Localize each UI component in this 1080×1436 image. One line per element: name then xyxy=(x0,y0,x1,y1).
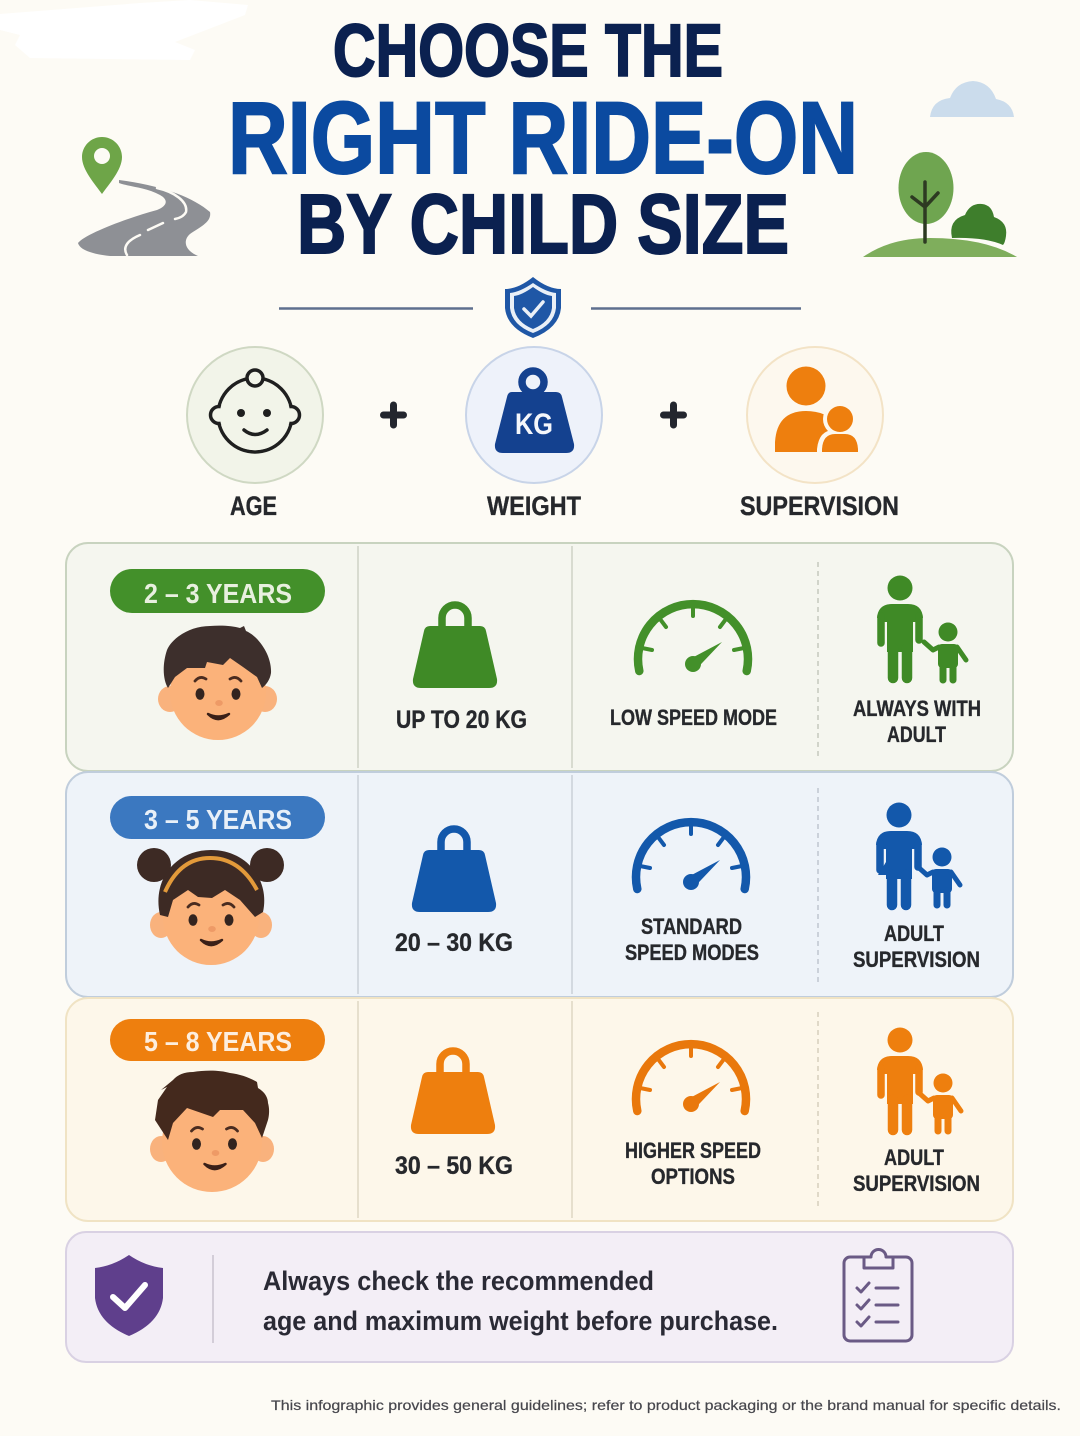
weight label: 20 – 30 KG xyxy=(395,929,513,957)
factor: weight xyxy=(466,347,602,521)
speed label xyxy=(625,914,759,965)
supervision label: ADULT xyxy=(884,1145,944,1170)
factor: weight: WEIGHT xyxy=(487,491,581,521)
age pill xyxy=(110,569,325,613)
panel: 5-8 years xyxy=(66,998,1013,1221)
title: BY CHILD SIZE xyxy=(297,177,789,271)
plus sign xyxy=(384,405,404,425)
footnote: This infographic provides general guidelines; refer to product packaging or the brand manual for specific details. xyxy=(271,1397,1061,1413)
adult and child icon xyxy=(877,1028,961,1131)
speed gauge xyxy=(638,604,748,672)
plus sign xyxy=(664,405,684,425)
factor: supervision xyxy=(740,347,899,521)
speed label xyxy=(625,1138,761,1189)
factor: age xyxy=(187,347,323,521)
speed label: SPEED MODES xyxy=(625,940,759,965)
speed label: LOW SPEED MODE xyxy=(610,705,777,730)
panel: 3-5 years xyxy=(66,772,1013,997)
adult and child icon xyxy=(876,802,960,905)
child face xyxy=(137,848,284,965)
divider with shield xyxy=(279,277,801,338)
supervision label: ADULT xyxy=(887,722,946,747)
icon: road with map pin xyxy=(78,137,210,256)
speed label: OPTIONS xyxy=(651,1164,735,1189)
age pill xyxy=(110,796,325,839)
speed label: HIGHER SPEED xyxy=(625,1138,761,1163)
age pill xyxy=(110,1019,325,1061)
weight icon xyxy=(412,829,496,912)
panel: purchase reminder xyxy=(66,1232,1013,1362)
weight icon xyxy=(413,605,497,688)
supervision label: ALWAYS WITH xyxy=(853,696,981,721)
age pill: 5 – 8 YEARS xyxy=(144,1026,292,1057)
title: CHOOSE THE xyxy=(333,9,723,92)
icon: tree and hill xyxy=(863,152,1017,257)
speed gauge xyxy=(636,1044,746,1112)
icon: clipboard xyxy=(844,1250,912,1341)
panel: 2-3 years xyxy=(66,543,1013,771)
supervision label xyxy=(853,696,981,747)
weight label: UP TO 20 KG xyxy=(396,706,527,734)
adult and child icon xyxy=(877,576,966,680)
factor: weight: KG xyxy=(515,408,553,441)
title: RIGHT RIDE-ON xyxy=(228,81,858,195)
reminder text: age and maximum weight before purchase. xyxy=(263,1306,778,1336)
icon: cloud xyxy=(930,81,1014,117)
child face xyxy=(150,1071,274,1192)
reminder text: Always check the recommended xyxy=(263,1266,654,1296)
child face xyxy=(158,626,277,740)
speed gauge xyxy=(636,822,746,890)
supervision label: SUPERVISION xyxy=(853,947,980,972)
weight label: 30 – 50 KG xyxy=(395,1152,513,1180)
age pill: 2 – 3 YEARS xyxy=(144,578,292,609)
supervision label: SUPERVISION xyxy=(853,1171,980,1196)
factor: age: AGE xyxy=(230,491,277,521)
age pill: 3 – 5 YEARS xyxy=(144,804,292,835)
speed label: STANDARD xyxy=(641,914,742,939)
reminder text xyxy=(263,1266,778,1336)
supervision label xyxy=(853,1145,980,1196)
icon: purple shield xyxy=(95,1255,163,1336)
weight icon xyxy=(411,1051,495,1134)
white patch top left xyxy=(0,0,248,60)
supervision label xyxy=(853,921,980,972)
title xyxy=(228,9,858,271)
factor: supervision: SUPERVISION xyxy=(740,491,899,521)
supervision label: ADULT xyxy=(884,921,944,946)
